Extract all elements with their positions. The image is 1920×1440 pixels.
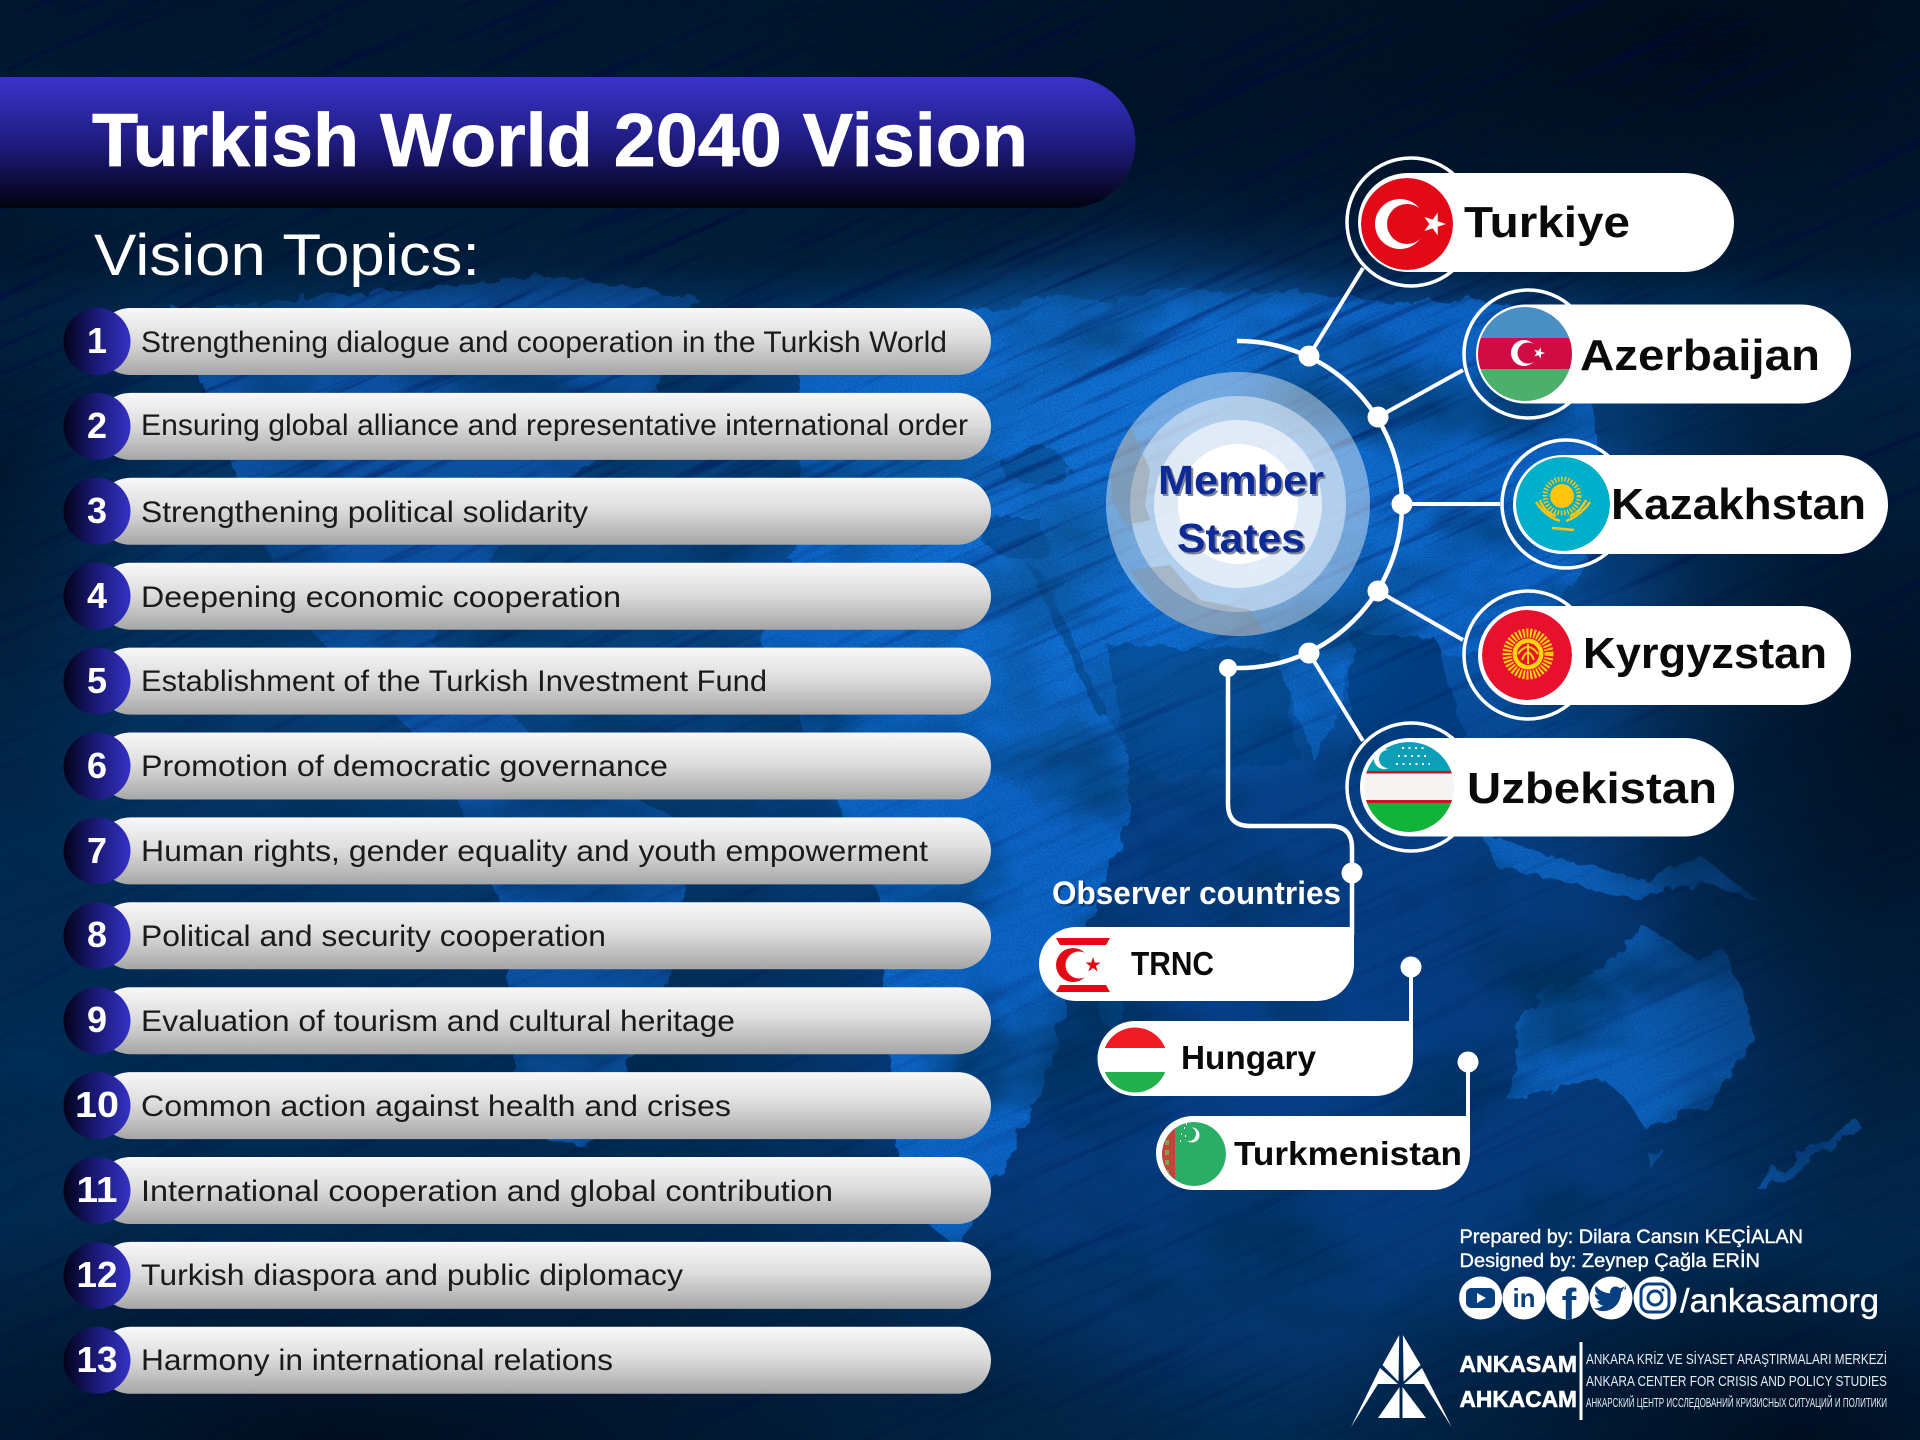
- topic 10: 10: [75, 1084, 119, 1125]
- topic 3: Strengthening political solidarity: [141, 496, 588, 529]
- observer: Turkmenistan: Turkmenistan: [1234, 1135, 1462, 1172]
- icon: facebook: f: [1562, 1280, 1577, 1329]
- heading: vision topics: Vision Topics:: [94, 223, 480, 288]
- topic 6: 6: [87, 745, 107, 786]
- topic 5: 5: [87, 660, 107, 701]
- topic 8: 8: [87, 914, 107, 955]
- social icons: [1459, 1276, 1676, 1329]
- flag: Hungary: [1104, 1028, 1166, 1092]
- topic 13: [64, 1327, 991, 1394]
- observer: TRNC: TRNC: [1131, 945, 1214, 982]
- logo wordmark: ANKASAM: [1460, 1351, 1577, 1377]
- topic 11: 11: [76, 1169, 118, 1210]
- observer: Turkmenistan: [1156, 1052, 1478, 1190]
- topic 12: [64, 1242, 991, 1309]
- member: Kazakhstan: Kazakhstan: [1611, 480, 1866, 529]
- logo wordmark: AHKACAM: [1460, 1386, 1577, 1412]
- connector network: arc and nodes: [1219, 268, 1500, 935]
- topic 8: [64, 902, 991, 969]
- topic 4: 4: [87, 575, 107, 616]
- flag: Turkmenistan: [1160, 1120, 1226, 1190]
- credits: Designed by: Zeynep Çağla ERİN: [1460, 1251, 1760, 1272]
- panel: vision topics list: [64, 308, 991, 1394]
- member: Azerbaijan: Azerbaijan: [1580, 331, 1820, 380]
- topic 3: 3: [87, 490, 107, 531]
- heading: observer countries: Observer countries: [1054, 877, 1343, 913]
- member states label: States: [1179, 517, 1307, 563]
- icon: twitter: [1593, 1285, 1626, 1311]
- topic 6: [64, 732, 991, 800]
- member: Kazakhstan: [1502, 440, 1888, 568]
- topic 12: Turkish diaspora and public diplomacy: [141, 1259, 683, 1292]
- topic 8: Political and security cooperation: [141, 920, 606, 953]
- member states label: [1158, 457, 1326, 563]
- flag: Uzbekistan: [1364, 742, 1454, 832]
- credits: [1460, 1227, 1803, 1272]
- flag: Azerbaijan: [1478, 307, 1572, 401]
- observer: Hungary: [1098, 956, 1422, 1096]
- topic 9: [64, 987, 991, 1054]
- topic 4: Deepening economic cooperation: [141, 581, 621, 614]
- observer: Hungary: Hungary: [1181, 1039, 1317, 1076]
- topic 9: 9: [87, 999, 107, 1040]
- flag: Kazakhstan: [1516, 457, 1610, 551]
- topic 13: Harmony in international relations: [141, 1344, 613, 1377]
- topic 2: [64, 393, 991, 460]
- topic 13: 13: [76, 1339, 118, 1380]
- topic 5: [64, 648, 991, 715]
- topic 11: International cooperation and global contribution: [141, 1175, 833, 1208]
- topic 10: Common action against health and crises: [141, 1090, 731, 1123]
- member: Kyrgyzstan: [1464, 591, 1851, 719]
- member: Uzbekistan: [1347, 723, 1734, 851]
- flag: Kyrgyzstan: [1482, 610, 1572, 700]
- topic 7: Human rights, gender equality and youth empowerment: [141, 835, 929, 868]
- title: Turkish World 2040 Vision: [92, 98, 1028, 182]
- topic 12: 12: [76, 1254, 118, 1295]
- member states label: Member: [1160, 459, 1326, 505]
- world map landmasses: [175, 275, 1860, 1250]
- topic 2: 2: [87, 405, 107, 446]
- member: Turkiye: [1347, 158, 1734, 286]
- member: Azerbaijan: [1464, 290, 1851, 418]
- topic 9: Evaluation of tourism and cultural heritage: [141, 1005, 735, 1038]
- flag: TRNC: [1056, 938, 1110, 992]
- topic 1: Strengthening dialogue and cooperation in the Turkish World: [141, 326, 947, 359]
- icon: instagram: [1641, 1284, 1669, 1312]
- member: Turkiye: Turkiye: [1464, 198, 1630, 247]
- member states label: States: [1177, 515, 1305, 561]
- topic 10: [64, 1072, 991, 1139]
- topic 11: [64, 1157, 991, 1224]
- logo: ANKASAM mark: [1351, 1335, 1452, 1427]
- topic 7: [64, 817, 991, 884]
- member: Uzbekistan: Uzbekistan: [1467, 764, 1717, 813]
- topic 2: Ensuring global alliance and representative international order: [141, 409, 968, 442]
- organization names: [1586, 1350, 1887, 1410]
- observer: TRNC: [1039, 927, 1354, 1001]
- member states label: Member: [1158, 457, 1324, 503]
- flag: Turkey: [1361, 178, 1453, 270]
- topic 1: 1: [87, 320, 107, 361]
- topic 6: Promotion of democratic governance: [141, 750, 668, 783]
- member: Kyrgyzstan: Kyrgyzstan: [1583, 629, 1827, 678]
- heading: observer countries: Observer countries: [1052, 875, 1341, 911]
- title banner: [0, 77, 1136, 208]
- social handle: /ankasamorg: [1680, 1282, 1879, 1319]
- topic 3: [64, 478, 991, 545]
- topic 4: [64, 563, 991, 630]
- topic 7: 7: [87, 830, 107, 871]
- topic 5: Establishment of the Turkish Investment Fund: [141, 665, 767, 698]
- icon: linkedin: in: [1512, 1283, 1536, 1313]
- logo divider: [1580, 1342, 1582, 1420]
- credits: Prepared by: Dilara Cansın KEÇİALAN: [1460, 1227, 1803, 1248]
- logo wordmark: [1460, 1351, 1577, 1412]
- member states hub: [1106, 372, 1370, 640]
- topic 1: [64, 308, 991, 375]
- icon: youtube: [1466, 1288, 1495, 1308]
- seas: [980, 445, 1470, 780]
